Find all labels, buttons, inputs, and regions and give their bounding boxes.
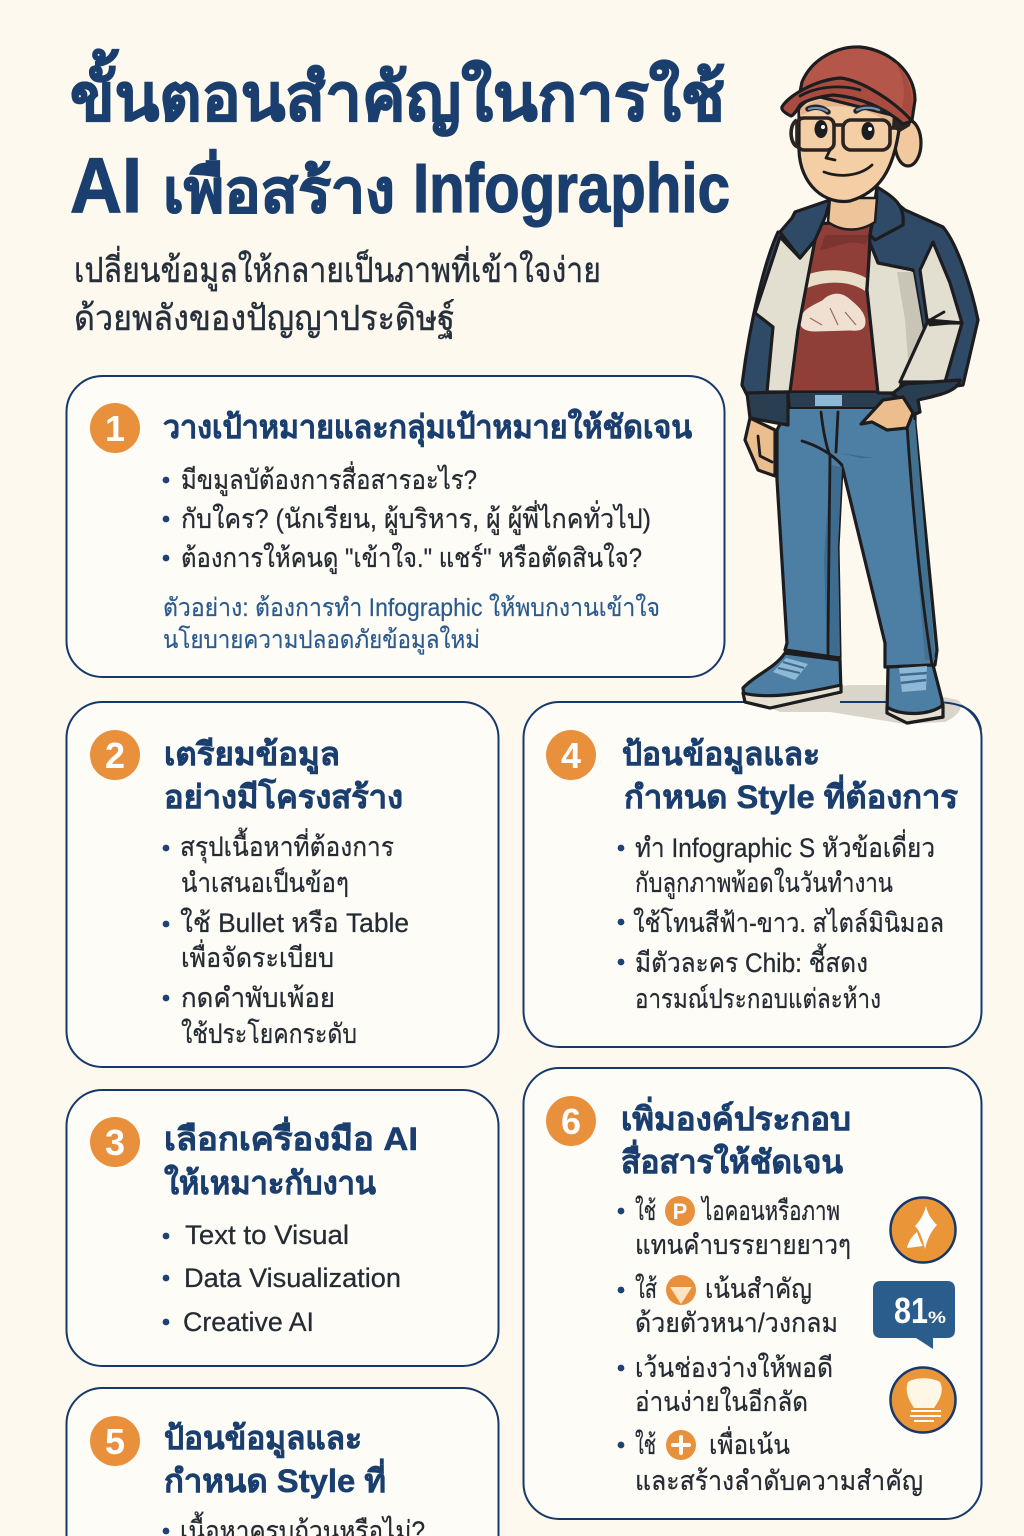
bullets step 1: กับใคร? (นักเรียน, ผู้บริหาร, ผู้ ผู้พี่ไกคทั่วไป): [181, 500, 651, 535]
bullets step 4: อารมณ์ประกอบแต่ละห้าง: [635, 983, 881, 1014]
bullet: spacing: [618, 1352, 833, 1417]
bullet: plus: [618, 1426, 923, 1496]
callout: 81%: %: [928, 1308, 946, 1327]
nose and mouth: [824, 150, 872, 175]
shoes: [743, 653, 943, 723]
badge 3: [90, 1117, 140, 1167]
heading step 1: วางเป้าหมายและกลุ่มเป้าหมายให้ชัดเจน: [163, 408, 692, 448]
bullets step 4: [618, 829, 944, 1014]
trousers: [777, 405, 937, 667]
head: [799, 93, 899, 202]
panel: step 1: [66, 376, 724, 677]
bullets step 2: นำเสนอเป็นข้อๆ: [181, 865, 349, 898]
panel: step 2: [66, 702, 498, 1067]
neck: [828, 198, 877, 230]
title: Infographic: [413, 149, 730, 227]
bullet: use icon: ใช้: [635, 1195, 656, 1226]
bullets step 3: Creative AI: [183, 1307, 314, 1337]
forehead shadow and hair: [800, 98, 895, 126]
title: ขั้นตอนสำคัญในการใช้: [70, 48, 725, 136]
bullet: use icon: ไอคอนหรือภาพ: [700, 1196, 840, 1226]
title: AI: [70, 141, 142, 229]
jacket: [742, 187, 978, 425]
badge 5: [90, 1416, 140, 1466]
badge 6: 6: [561, 1101, 581, 1142]
heading step 5: [164, 1420, 386, 1499]
shirt: [788, 220, 890, 392]
bullet: use icon: [618, 1195, 851, 1260]
heading step 3: [164, 1116, 418, 1201]
bullet: plus: ใช้: [635, 1429, 656, 1460]
bullets step 1: ต้องการให้คนดู "เข้าใจ." แชร์" หรือตัดสินใจ?: [181, 542, 642, 574]
bullets step 2: ใช้ประโยคกระดับ: [181, 1018, 357, 1049]
bullets step 1: มีขมูลบัต้องการสื่อสารอะไร?: [181, 461, 477, 496]
badge 6: [546, 1096, 596, 1146]
character: cartoon man with cap and jacket: [742, 47, 981, 730]
bullets step 4: ใช้โทนสีฟ้า-ขาว. สไตล์มินิมอล: [633, 907, 944, 938]
bullets step 4: กับลูกภาพพ้อดในวันทำงาน: [635, 867, 893, 899]
bullet: use icon: แทนคำบรรยายยาวๆ: [635, 1230, 851, 1260]
bullet: plus: เพื่อเน้น: [709, 1426, 790, 1460]
side hair: [892, 112, 912, 132]
ear: [895, 120, 921, 166]
callout: 81%: 81: [894, 1290, 928, 1331]
panel: step 4: [524, 702, 982, 1047]
bullets step 2: สรุปเนื้อหาที่ต้องการ: [180, 827, 394, 864]
panel: step 6: [524, 1068, 982, 1519]
right cuff: [893, 380, 960, 415]
bullets step 3: [163, 1220, 401, 1337]
example step 1: นโยบายความปลอดภัยข้อมูลใหม่: [163, 625, 480, 655]
badge 1: [90, 403, 140, 453]
panel: step 3: [66, 1090, 498, 1366]
bullets step 4: ทำ Infographic S หัวข้อเดี่ยว: [635, 829, 935, 863]
example step 1: ตัวอย่าง: ต้องการทำ Infographic ให้พบกงานเข้าใจ: [163, 593, 660, 622]
bullets step 2: [163, 827, 409, 1049]
left cuff: [747, 392, 788, 425]
belt: [788, 392, 897, 408]
bullet: highlight: ด้วยตัวหนา/วงกลม: [635, 1308, 838, 1338]
example step 1: [163, 593, 660, 655]
heading step 6: สื่อสารให้ชัดเจน: [621, 1139, 843, 1180]
panel: step 5: [66, 1388, 498, 1536]
heading step 2: อย่างมีโครงสร้าง: [164, 778, 403, 815]
heading step 6: เพิ่มองค์ประกอบ: [621, 1096, 851, 1137]
heading step 4: กำหนด Style ที่ต้องการ: [624, 774, 958, 815]
heading step 5: กำหนด Style ที่: [164, 1458, 386, 1499]
subtitle: [74, 246, 601, 339]
heading step 2: [164, 736, 403, 815]
heading step 6: [621, 1096, 851, 1180]
bullet: spacing: อ่านง่ายในอีกลัด: [635, 1386, 808, 1417]
title: เพื่อสร้าง: [163, 149, 395, 225]
badge 3: 3: [105, 1122, 125, 1163]
cap: [782, 47, 915, 124]
heading step 4: ป้อนข้อมูลและ: [622, 736, 820, 775]
bullet: spacing: เว้นช่องว่างให้พอดี: [635, 1352, 833, 1383]
bullets step 2: ใช้ Bullet หรือ Table: [180, 907, 409, 938]
bullet: highlight: ใส้: [635, 1273, 657, 1304]
badge 4: 4: [561, 735, 581, 776]
bullet: highlight: [618, 1273, 838, 1338]
bullet: use icon: P: [673, 1199, 687, 1224]
callout: 81%: [873, 1281, 955, 1349]
subtitle: ด้วยพลังของปัญญาประดิษฐ์: [74, 299, 455, 339]
badge 2: 2: [105, 735, 125, 776]
badge 1: 1: [105, 408, 125, 449]
bullets step 4: มีตัวละคร Chib: ชี้สดง: [635, 943, 868, 978]
badge 2: [90, 730, 140, 780]
icon: light bulb: [890, 1368, 956, 1432]
badge 4: [546, 730, 596, 780]
heading step 3: เลือกเครื่องมือ AI: [164, 1116, 418, 1157]
bullets step 3: Text to Visual: [185, 1220, 349, 1250]
collar left: [780, 200, 830, 258]
heading step 4: [622, 736, 958, 815]
heading step 5: ป้อนข้อมูลและ: [164, 1420, 362, 1459]
ground shadow: [745, 685, 961, 724]
bullets step 3: Data Visualization: [184, 1263, 401, 1293]
hands: [745, 397, 913, 476]
eyes and brows: [808, 107, 880, 140]
collar right: [870, 187, 903, 240]
heading step 2: เตรียมข้อมูล: [164, 736, 340, 775]
bullets step 1: [163, 461, 651, 574]
glasses: [791, 118, 901, 150]
bullet: highlight: เน้นสำคัญ: [705, 1274, 812, 1304]
heading step 3: ให้เหมาะกับงาน: [164, 1164, 376, 1201]
title: [70, 48, 730, 229]
bullets step 2: เพื่อจัดระเบียบ: [181, 939, 334, 973]
badge 5: 5: [105, 1421, 125, 1462]
bullets step 5: [163, 1511, 425, 1536]
bullets step 2: กดคำพับเพ้อย: [181, 983, 335, 1013]
icon: diamond flame: [890, 1198, 956, 1262]
bullet: plus: และสร้างลำดับความสำคัญ: [635, 1466, 923, 1496]
subtitle: เปลี่ยนข้อมูลให้กลายเป็นภาพที่เข้าใจง่าย: [74, 246, 601, 291]
